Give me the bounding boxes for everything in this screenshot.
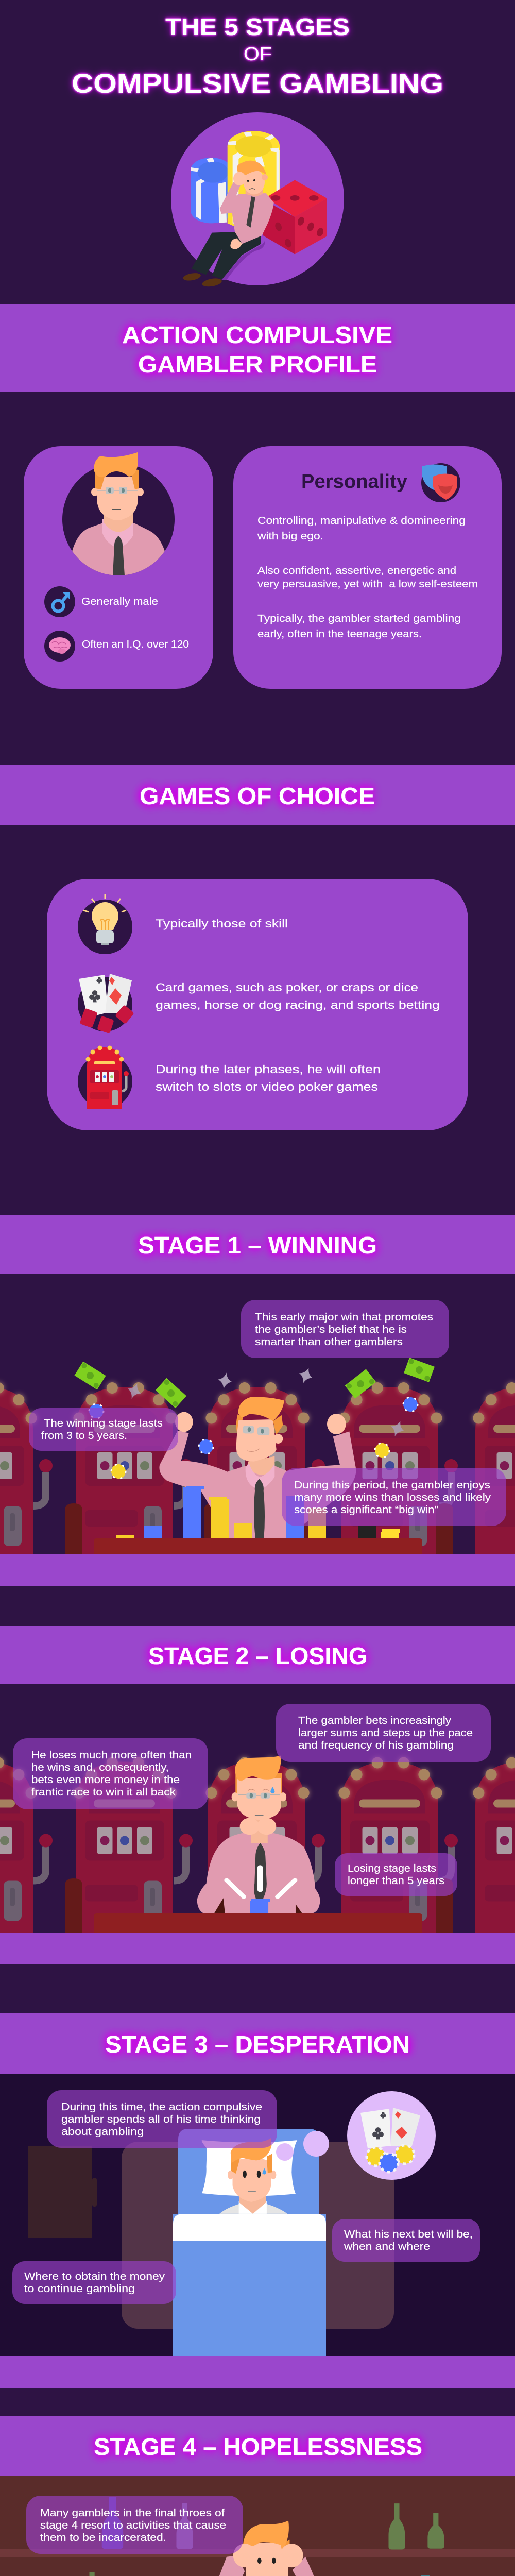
callout: all his time thinking: During this time, the action compulsive — [61, 2102, 262, 2113]
text block: personality traits: Also confident, assertive, energetic and — [258, 565, 456, 577]
section band: games of choice — [0, 765, 515, 825]
title: OF — [244, 43, 272, 64]
callout: incarcerated: them to be incarcerated. — [40, 2532, 166, 2544]
callout: loses more often: He loses much more often than — [31, 1750, 192, 1761]
callout: losing stage length — [335, 1853, 457, 1896]
icon: theatre masks — [421, 463, 460, 502]
callout: all his time thinking — [47, 2090, 277, 2148]
title: THE 5 STAGES — [165, 13, 350, 40]
callout: winning stage length: from 3 to 5 years. — [41, 1430, 127, 1442]
thought bubble: cards and chips — [276, 2091, 436, 2180]
lower band: stage 3 — [0, 2356, 515, 2388]
gambler head in hands — [196, 2520, 340, 2576]
callout: incarcerated: stage 4 resort to activities that cause — [40, 2520, 226, 2531]
callout: obtain money — [12, 2261, 176, 2304]
icon: slot machine — [78, 1046, 132, 1109]
callout: early major win — [241, 1300, 449, 1358]
callout: wins more than losses: many more wins than losses and likely — [294, 1492, 491, 1503]
text block: personality traits: Controlling, manipulative & domineering — [258, 515, 466, 527]
scene: stage 1 casino — [0, 1358, 515, 1562]
title — [72, 13, 443, 99]
scene: stage 3 bedroom — [0, 2074, 515, 2356]
text block: personality traits — [257, 515, 478, 640]
text block: personality traits: early, often in the teenage years. — [258, 629, 422, 640]
lower band: stage 1 — [0, 1554, 515, 1586]
heading: stage 1 winning — [0, 1215, 515, 1274]
icon: red die — [263, 180, 327, 254]
callout: bets increasingly larger: larger sums and steps up the pace — [298, 1727, 473, 1739]
callout: early major win: the gambler’s belief that he is — [255, 1324, 407, 1335]
icon: blue chip stack — [191, 158, 232, 223]
slot machines row — [0, 1757, 515, 1937]
panel: games of choice — [47, 879, 468, 1130]
section band: action compulsive gambler profile: ACTION COMPULSIVE — [122, 321, 392, 348]
headboard — [122, 2142, 394, 2329]
lower band: stage 2 — [0, 1933, 515, 1964]
text: slots and video poker: During the later phases, he will often — [156, 1063, 381, 1076]
text: card games — [156, 981, 440, 1011]
heading: stage 4 hopelessness: STAGE 4 – HOPELESSNESS — [94, 2433, 422, 2460]
gambler worried — [197, 1756, 320, 1913]
callout: bets increasingly larger: and frequency of his gambling — [298, 1740, 454, 1751]
panel: gambler demographics — [24, 446, 213, 689]
seated gambler — [182, 161, 274, 288]
gambler cheering — [159, 1397, 356, 1539]
callout: bets increasingly larger — [276, 1704, 491, 1762]
callout: incarcerated — [26, 2496, 243, 2554]
callout: all his time thinking: gambler spends all of his time thinking — [61, 2114, 261, 2125]
text: typically those of skill: Typically those of skill — [156, 917, 288, 930]
heading: stage 3 desperation: STAGE 3 – DESPERATION — [105, 2031, 410, 2058]
callout: next bet — [332, 2219, 480, 2262]
callout: incarcerated: Many gamblers in the final throes of — [40, 2507, 225, 2519]
callout: wins more than losses: During this period, the gambler enjoys — [294, 1480, 490, 1491]
heading: stage 2 losing — [0, 1626, 515, 1684]
callout: wins more than losses — [282, 1468, 506, 1526]
callout: losing stage length: Losing stage lasts — [348, 1863, 436, 1874]
heading: stage 3 desperation — [0, 2013, 515, 2074]
callout: all his time thinking: about gambling — [61, 2126, 144, 2138]
section band: games of choice: GAMES OF CHOICE — [140, 783, 375, 809]
callout: loses more often: bets even more money in the — [31, 1774, 180, 1786]
callout: losing stage length: longer than 5 years — [348, 1875, 444, 1887]
panel: personality — [233, 446, 502, 689]
callout: loses more often — [13, 1738, 208, 1809]
icon: gambler portrait — [62, 452, 175, 582]
text: card games: Card games, such as poker, or craps or dice — [156, 981, 418, 994]
section band: action compulsive gambler profile — [0, 304, 515, 392]
heading: personality: Personality — [301, 471, 407, 493]
section band: action compulsive gambler profile: GAMBLER PROFILE — [138, 351, 377, 378]
text: iq over 120: Often an I.Q. over 120 — [82, 639, 189, 650]
callout: winning stage length — [29, 1408, 178, 1451]
icon: cards and dice — [78, 974, 134, 1033]
table — [94, 1538, 422, 1554]
text: slots and video poker: switch to slots or video poker games — [156, 1080, 378, 1093]
callout: winning stage length: The winning stage lasts — [44, 1418, 163, 1429]
text: card games: games, horse or dog racing, and sports betting — [156, 998, 440, 1011]
door — [28, 2146, 97, 2238]
heading: stage 2 losing: STAGE 2 – LOSING — [148, 1642, 367, 1669]
callout: obtain money: Where to obtain the money — [24, 2271, 165, 2282]
callout: loses more often: he wins and, consequently, — [31, 1762, 169, 1773]
icon: light bulb — [78, 894, 132, 954]
flying money, stars and chips — [74, 1358, 435, 1479]
bed and sleeper — [173, 2129, 326, 2356]
text: generally male: Generally male — [81, 596, 158, 607]
callout: next bet: when and where — [344, 2241, 430, 2252]
slot machines row — [0, 1382, 515, 1562]
icon: male symbol — [44, 586, 75, 617]
bottles on shelves — [84, 2497, 444, 2576]
text block: personality traits: with big ego. — [257, 531, 323, 542]
text block: personality traits: Typically, the gambler started gambling — [258, 613, 461, 624]
callout: obtain money: to continue gambling — [24, 2283, 135, 2295]
callout: loses more often: frantic race to win it all back — [31, 1787, 176, 1798]
callout: early major win: This early major win that promotes — [255, 1312, 433, 1323]
callout: next bet: What his next bet will be, — [344, 2229, 473, 2240]
scene: stage 4 bar — [0, 2476, 515, 2576]
table — [94, 1913, 422, 1933]
heading: stage 1 winning: STAGE 1 – WINNING — [138, 1232, 377, 1259]
callout: early major win: smarter than other gamblers — [255, 1336, 403, 1348]
callout: wins more than losses: scores a significant “big win” — [294, 1504, 438, 1516]
stools — [65, 1878, 453, 1933]
hero illustration: gambler with chips and dice — [171, 112, 344, 288]
stools — [65, 1503, 453, 1554]
icon: brain — [44, 631, 75, 662]
callout: bets increasingly larger: The gambler bets increasingly — [298, 1715, 451, 1726]
text block: personality traits: very persuasive, yet with a low self-esteem — [258, 579, 478, 590]
chip stacks — [116, 1486, 400, 1538]
heading: stage 4 hopelessness — [0, 2416, 515, 2476]
text: slots and video poker — [156, 1063, 381, 1093]
icon: yellow chip stack — [228, 131, 280, 228]
scene: stage 2 casino — [0, 1756, 515, 1937]
title: COMPULSIVE GAMBLING — [72, 69, 443, 99]
